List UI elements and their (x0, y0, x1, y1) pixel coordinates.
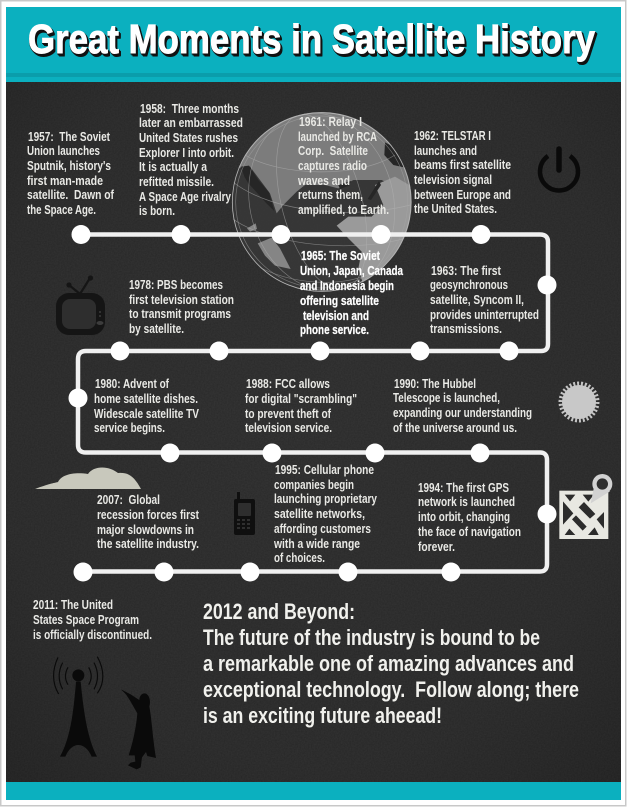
icon: sun (560, 384, 598, 420)
text: 1957: Union launches (27, 143, 100, 158)
text: 2012 and beyond: 2012 and Beyond: (203, 599, 355, 624)
text: 1965 (300, 248, 404, 337)
text: 1963: geosynchronous (430, 277, 508, 292)
text: 1980 (94, 376, 199, 435)
globe: australia (247, 223, 291, 269)
globe: africa and south america (337, 177, 415, 285)
text: 1958: It is actually a (139, 159, 208, 174)
text: 1994: network is launched (418, 494, 515, 509)
text: 1963: satellite, Syncom II, (430, 292, 524, 307)
text: 1978: to transmit programs (129, 306, 231, 321)
text: 1995: of choices. (274, 550, 325, 565)
text: 1958: 1958: Three months (140, 101, 239, 116)
timeline path (78, 234, 548, 572)
text: 1961: returns them, (298, 187, 363, 202)
icon: mobile phone (234, 492, 255, 535)
text: 1961: captures radio (298, 158, 367, 173)
text: 1958: Explorer I into orbit. (139, 145, 234, 160)
text: 1995: affording customers (274, 521, 371, 536)
footer band (6, 782, 621, 800)
text: 2007: 2007: Global (97, 492, 160, 507)
header band (6, 7, 621, 82)
text: 1995: 1995: Cellular phone (275, 462, 374, 477)
text: 2012 and beyond: The future of the industry is bound to be (203, 625, 540, 650)
text: 2011: States Space Program (33, 612, 139, 627)
text: 1995: satellite networks, (274, 506, 365, 521)
text: 1965: 1965: The Soviet (301, 248, 381, 263)
text: 1963 (430, 263, 539, 336)
text: 1990 (393, 376, 532, 435)
text: 2011: 2011: The United (33, 597, 113, 612)
text: 1958: is born. (139, 203, 175, 218)
globe (232, 112, 412, 292)
text: 1994: 1994: The first GPS (418, 480, 509, 495)
text: 1958: refitted missile. (139, 174, 214, 189)
text: 1961: Corp. Satellite (298, 143, 368, 158)
text: 1994: into orbit, changing (418, 509, 510, 524)
text: 1958: United States rushes (139, 130, 238, 145)
text: 1957: Sputnik, history's (27, 158, 111, 173)
text: 1957: satellite. Dawn of (27, 187, 115, 202)
text: 1995: companies begin (274, 477, 354, 492)
text: 1957: 1957: The Soviet (28, 129, 111, 144)
icon: power button (540, 149, 578, 190)
globe: grid lines (233, 113, 410, 292)
globe: dark coastlines (241, 142, 408, 211)
text: 1957 (27, 129, 115, 217)
text: 1980: service begins. (94, 420, 165, 435)
text: 1990: Telescope is launched, (393, 390, 500, 405)
text: 1962: beams first satellite (414, 157, 511, 172)
text: 1988: television service. (245, 420, 332, 435)
text: 1957: the Space Age. (27, 202, 96, 217)
timeline nodes (68, 225, 556, 582)
text: 1995 (273, 462, 378, 565)
text: 1990: expanding our understanding (393, 405, 532, 420)
text: 2011: is officially discontinued. (33, 627, 152, 642)
text: 1961: 1961: Relay I (299, 114, 362, 129)
text: 1963: transmissions. (430, 321, 502, 336)
text: 2007: major slowdowns in (97, 522, 194, 537)
text: 1965: television and (303, 308, 369, 323)
text: 1965: Union, Japan, Canada (300, 263, 404, 278)
text: 1978: first television station (129, 292, 234, 307)
text: 1961: amplified, to Earth. (298, 202, 389, 217)
text: 1988: to prevent theft of (245, 406, 332, 421)
text: 1958: later an embarrassed (139, 115, 243, 130)
icon: silhouette figure (121, 689, 156, 769)
text: 1980: home satellite dishes. (94, 391, 198, 406)
text: 1978 (129, 277, 234, 336)
globe: asia landmass (232, 108, 415, 213)
text: 1961: launched by RCA (298, 129, 377, 144)
text: 2007 (97, 492, 200, 551)
text: 1988 (245, 376, 357, 435)
icon: cloud (35, 467, 141, 489)
text: 2012 and beyond (203, 599, 579, 728)
text: 1994: forever. (418, 539, 455, 554)
icon: radio tower and silhouette (54, 657, 156, 769)
text: 2007: recession forces first (97, 507, 200, 522)
text: 1990: 1990: The Hubbel (394, 376, 476, 391)
text: 1962: 1962: TELSTAR I (414, 128, 491, 143)
text: 1980: 1980: Advent of (95, 376, 170, 391)
text: 1995: launching proprietary (274, 491, 378, 506)
icon: radio tower (54, 657, 103, 757)
text: 1962: television signal (414, 172, 492, 187)
text: 2011 (33, 597, 152, 642)
text: 1965: and Indonesia begin (300, 278, 394, 293)
text: 1965: phone service. (300, 322, 369, 337)
text: 1963: 1963: The first (431, 263, 502, 278)
text: 1995: with a wide range (273, 536, 360, 551)
icon: map with pin (559, 474, 612, 539)
text: 1978: 1978: PBS becomes (129, 277, 223, 292)
text: 2007: the satellite industry. (97, 536, 199, 551)
text: 1962: launches and (414, 143, 477, 158)
text: 1990: of the universe around us. (393, 420, 517, 435)
icon: television (56, 275, 105, 335)
text: 1980: Widescale satellite TV (94, 406, 199, 421)
text: 1961: waves and (297, 173, 350, 188)
text: 1962 (414, 128, 511, 216)
text: 1961 (297, 114, 389, 217)
text: 1988: for digital "scrambling" (245, 391, 357, 406)
text: 1958: A Space Age rivalry (139, 189, 232, 204)
text: 1963: provides uninterrupted (430, 307, 539, 322)
text: 1962: between Europe and (414, 187, 511, 202)
text: 1988: 1988: FCC allows (246, 376, 330, 391)
text: 1994: the face of navigation (418, 524, 521, 539)
text: 1978: by satellite. (129, 321, 184, 336)
text: 1965: offering satellite (300, 293, 379, 308)
text: 2012 and beyond: is an exciting future aheead! (203, 703, 442, 728)
text: 1958 (139, 101, 243, 218)
text: 1994 (418, 480, 521, 554)
text: 1962: the United States. (414, 201, 497, 216)
text: 1957: first man-made (27, 173, 103, 188)
